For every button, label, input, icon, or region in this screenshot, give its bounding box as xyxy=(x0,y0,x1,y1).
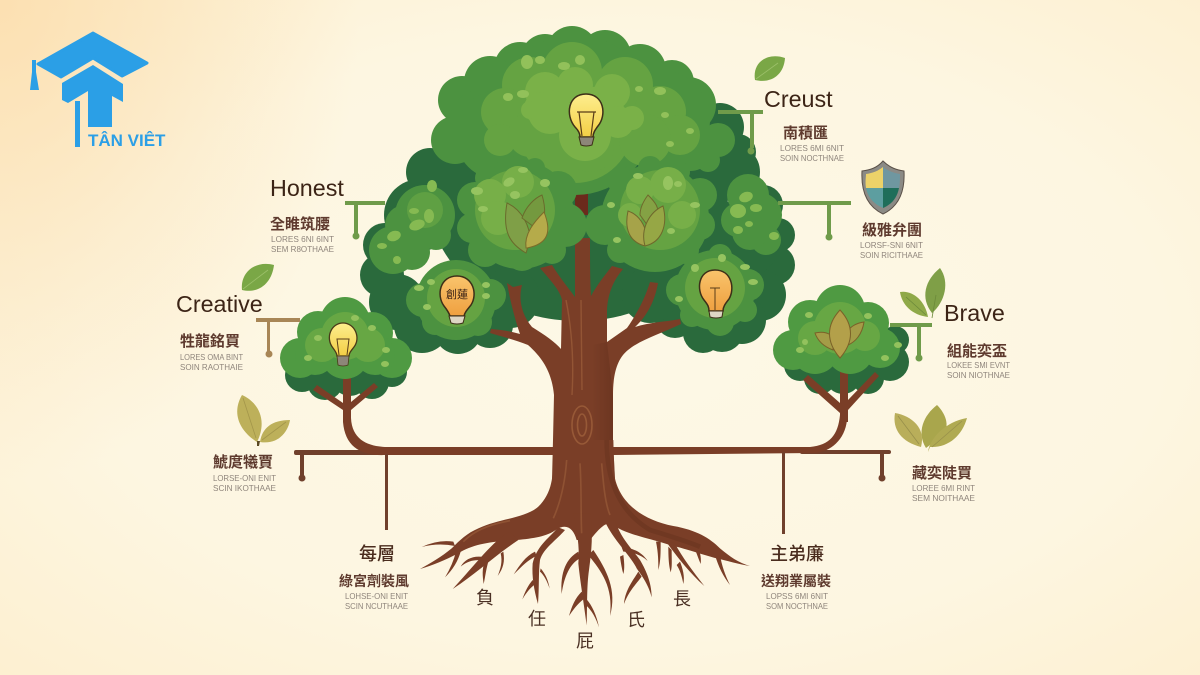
label: bottom right: 主弟廉 xyxy=(770,544,824,564)
label: lower right: SEM NOITHAAE xyxy=(912,494,976,503)
label: Honest xyxy=(270,175,344,254)
root body xyxy=(420,440,750,569)
label: lower right: 藏奕陡買 xyxy=(912,464,972,482)
icon: orange bulb right xyxy=(699,270,732,318)
icon: leaves right cluster xyxy=(627,195,665,246)
root characters: 任 xyxy=(528,609,546,629)
label: Honest: Honest xyxy=(270,175,344,201)
label: Honest: 全睢筑腰 xyxy=(270,215,330,233)
brave connector xyxy=(890,323,932,362)
creust connector xyxy=(718,110,763,154)
label: Creust: SOIN NOCTHNAE xyxy=(780,154,844,163)
canopy: far left cluster xyxy=(369,180,455,274)
logo: Tan Viet xyxy=(30,33,166,150)
logo: Tan Viet: TÂN VIÊT xyxy=(88,131,166,150)
trunk and upper limbs xyxy=(490,170,681,480)
label: Creust: Creust xyxy=(764,86,833,112)
label: Brave: SOIN NIOTHNAE xyxy=(947,371,1011,380)
leaf near creative xyxy=(242,264,274,291)
leaves lower right xyxy=(894,405,967,452)
label: Honest: LORES 6NI 6INT xyxy=(271,235,334,244)
label: Brave: LOKEE SMI EVNT xyxy=(947,361,1010,370)
leaves near brave xyxy=(900,268,945,318)
label: shield text: 級雅弁團 xyxy=(862,221,922,239)
label: bottom right: LOPSS 6MI 6NIT xyxy=(766,592,828,601)
leaves lower left xyxy=(237,395,290,446)
label: Creative: SOIN RAOTHAIE xyxy=(180,363,244,372)
icon: leaves small right tree xyxy=(815,310,864,358)
main tree canopy: dark back layer xyxy=(360,69,795,354)
label: Creative xyxy=(176,291,263,372)
shield connector xyxy=(778,201,851,240)
label: shield text xyxy=(860,221,924,260)
label: bottom right: 送翔業屬裝 xyxy=(761,573,831,589)
icon: yellow bulb top xyxy=(569,94,603,146)
label: lower right: LOREE 6MI RINT xyxy=(912,484,975,493)
label: bottom right: SOM NOCTHNAE xyxy=(766,602,828,611)
label: lower right xyxy=(912,464,976,503)
label: bottom left: LOHSE-ONI ENIT xyxy=(345,592,408,601)
label: Honest: SEM R8OTHAAE xyxy=(271,245,335,254)
label: Creust xyxy=(764,86,844,163)
canopy: far right cluster xyxy=(721,174,782,255)
label: lower left: LORSE-ONI ENIT xyxy=(213,474,276,483)
left limb to small tree and brown connector xyxy=(294,400,555,530)
icon: orange bulb left with label: 創蓮 xyxy=(446,288,468,301)
label: bottom left xyxy=(339,544,409,611)
trunk shading xyxy=(592,342,615,480)
icon: shield xyxy=(862,161,904,214)
label: Creative: LORES OMA BINT xyxy=(180,353,243,362)
root system xyxy=(420,440,750,627)
root characters xyxy=(476,588,691,651)
label: bottom right xyxy=(761,544,831,611)
icon: orange bulb left with label xyxy=(440,276,474,324)
root characters: 長 xyxy=(673,589,691,609)
label: Creative: Creative xyxy=(176,291,263,317)
honest connector xyxy=(345,201,385,240)
label: bottom left: SCIN NCUTHAAE xyxy=(345,602,409,611)
canopy: upper crown xyxy=(431,26,735,195)
label: shield text: SOIN RICITHAAE xyxy=(860,251,924,260)
label: Brave xyxy=(944,300,1011,380)
trunk wood knot xyxy=(572,406,592,444)
icon: leaves left cluster xyxy=(506,195,548,253)
label: shield text: LORSF-SNI 6NIT xyxy=(860,241,923,250)
label: Brave: 組能奕盃 xyxy=(947,342,1007,360)
creative connector xyxy=(256,318,300,358)
small right tree xyxy=(773,285,909,422)
label: Creative: 牲龍銘買 xyxy=(180,332,240,350)
canopy: lower left cluster xyxy=(406,260,506,340)
root characters: 屁 xyxy=(576,631,594,651)
label: bottom left: 綠宮劑裝風 xyxy=(339,573,409,589)
right limb to small tree and brown connector xyxy=(613,400,891,534)
label: bottom left: 每層 xyxy=(359,544,395,564)
small left tree xyxy=(280,297,412,420)
root characters: 氏 xyxy=(627,610,645,630)
label: Brave: Brave xyxy=(944,300,1005,326)
root characters: 負 xyxy=(476,588,494,608)
canopy: right middle cluster xyxy=(585,156,717,272)
canopy: left middle cluster xyxy=(457,156,587,271)
label: lower left: 鯱庹犧賈 xyxy=(213,453,273,471)
label: Creust: 南積匯 xyxy=(783,124,828,142)
leaf near creust xyxy=(755,56,785,81)
label: lower left xyxy=(213,453,277,493)
label: Creust: LORES 6MI 6NIT xyxy=(780,144,844,153)
canopy: lower right cluster xyxy=(666,244,764,336)
icon: yellow bulb small tree xyxy=(329,323,357,366)
label: lower left: SCIN IKOTHAAE xyxy=(213,484,277,493)
